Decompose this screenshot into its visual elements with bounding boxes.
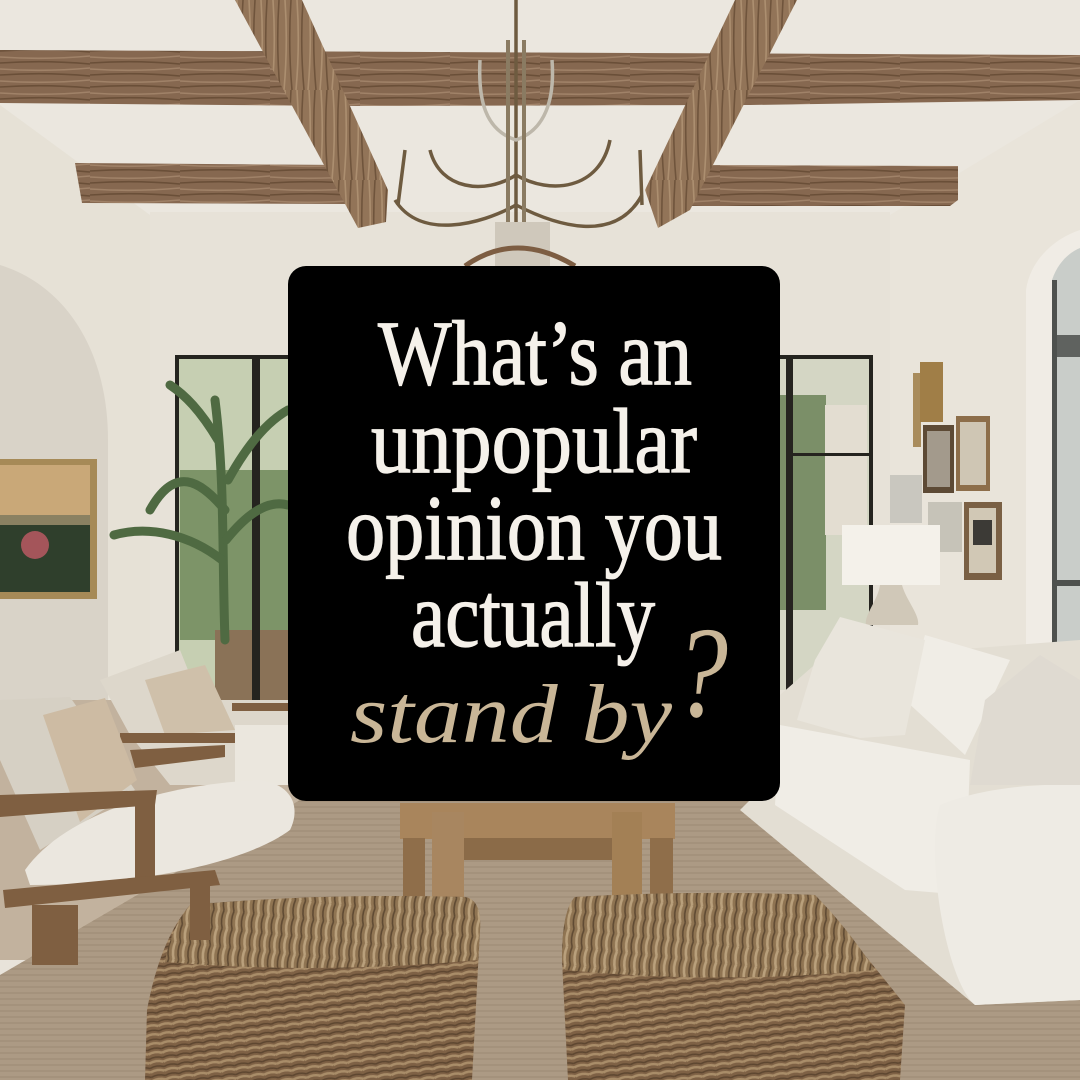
woven ottoman right — [562, 893, 905, 1080]
script words: stand by — [350, 668, 673, 761]
heading line 4: actually — [411, 564, 655, 666]
rug — [0, 800, 1080, 1080]
heading line 2: unpopular — [371, 390, 697, 492]
right window with foliage — [780, 355, 873, 690]
palm fronds — [114, 385, 288, 640]
lower left beam — [75, 163, 345, 204]
ceiling — [0, 0, 1080, 810]
left arch opening — [0, 265, 108, 700]
table lamp — [842, 525, 940, 625]
painting on arch wall — [0, 459, 97, 599]
heading line 3: opinion you — [346, 477, 722, 579]
armchair back — [100, 650, 290, 785]
left wall — [0, 105, 150, 700]
sofa back cushion — [905, 635, 1010, 755]
gallery wall art — [890, 362, 1002, 580]
chandelier — [395, 0, 642, 266]
left window with foliage — [114, 355, 290, 700]
armchair front — [0, 697, 295, 965]
floor — [0, 700, 300, 960]
upper horizontal beam — [0, 50, 1080, 106]
woven ottoman left — [145, 896, 480, 1080]
script accent text — [350, 601, 728, 761]
left diagonal beam — [235, 0, 388, 228]
right diagonal beam — [645, 0, 797, 228]
heading — [346, 302, 722, 666]
question card — [288, 266, 780, 801]
card panel — [288, 266, 780, 801]
white sofa — [740, 617, 1080, 1005]
ceiling beams — [0, 0, 1080, 228]
lower right beam — [690, 165, 958, 206]
sofa cushion right — [970, 655, 1080, 785]
back wall — [150, 212, 890, 812]
right wall — [890, 100, 1080, 680]
coffee table — [400, 803, 675, 902]
far right arched window — [1026, 230, 1080, 670]
script question mark: ? — [674, 601, 728, 745]
heading line 1: What’s an — [378, 302, 692, 404]
sofa cushion left — [797, 617, 925, 738]
